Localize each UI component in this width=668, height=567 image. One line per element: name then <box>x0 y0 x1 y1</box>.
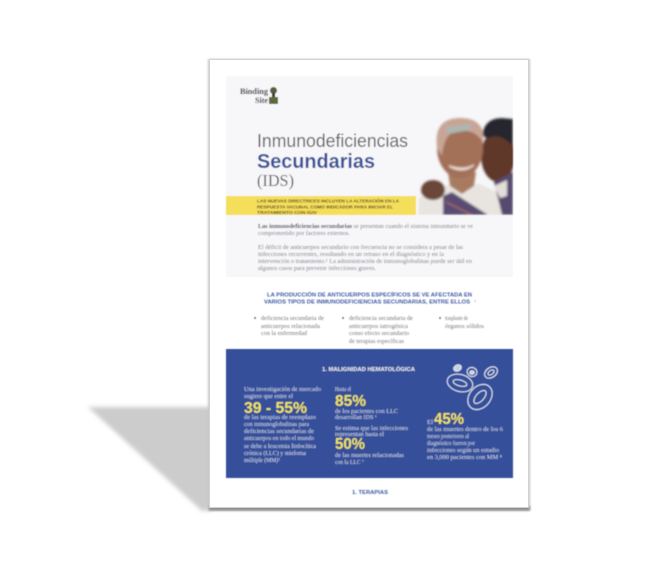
stat column: 39 - 55%: sugiere que entre el <box>244 393 293 400</box>
intro text block <box>258 223 473 272</box>
intro text block: intervención o tratamiento.¹ La administración de inmunoglobulinas puede ser útil en <box>258 258 473 265</box>
photo: two women embracing <box>418 118 515 215</box>
bullet list: column 3: órganos sólidos <box>445 323 484 330</box>
logo: Binding Site: Site <box>255 95 268 105</box>
stat column: 39 - 55%: crónica (LLC) y mieloma <box>244 450 306 457</box>
section heading: specific antibodies: VARIOS TIPOS DE INMUNODEFICIENCIAS SECUNDARIAS, ENTRE ELLOS <box>264 300 470 306</box>
bullet list: column 1: deficiencia secundaria de <box>261 315 324 322</box>
panel: hematologic malignancy <box>226 349 513 478</box>
bullet list: column 2: de terapias específicas <box>349 338 404 345</box>
intro text block: infecciones recurrentes, resultando en un retraso en el diagnóstico y en la <box>258 251 444 258</box>
stat column: 39 - 55%: deficiencias secundarias de <box>244 428 314 435</box>
bullet list: column 2 <box>342 315 413 345</box>
stat column: 39 - 55%: se debe a leucemia linfocítica <box>244 443 316 450</box>
section heading: specific antibodies: LA PRODUCCIÓN DE ANTICUERPOS ESPECÍFICOS SE VE AFECTADA EN <box>267 290 472 298</box>
stat column: 45%: diagnóstico fueron por <box>427 440 476 447</box>
stat column: 85% and 50%: Se estima que las infecciones <box>335 425 409 432</box>
intro text block: Las inmunodeficiencias secundarias se presentan cuando el sistema inmunitario se ve <box>258 223 473 230</box>
stat column: 85% and 50%: de las muertes relacionadas <box>335 452 405 459</box>
stat column: 45% <box>427 411 503 461</box>
stat column: 39 - 55% <box>244 386 321 464</box>
stat column: 45%: 45% <box>434 411 464 428</box>
bullet list: column 3 <box>439 315 484 330</box>
stat column: 85% and 50%: 85% <box>335 393 366 410</box>
stat column: 39 - 55%: con inmunoglobulinas para <box>244 421 309 428</box>
bullet list: column 2: como efecto secundario <box>349 330 409 337</box>
bullet list: column 1 <box>254 315 324 337</box>
panel heading: 1. MALIGNIDAD HEMATOLÓGICA <box>322 365 416 373</box>
next section heading: therapies: 1. TERAPIAS <box>352 490 388 496</box>
stat column: 39 - 55%: Una investigación de mercado <box>244 386 321 393</box>
title <box>257 130 408 190</box>
bullet list: column 1: anticuerpos relacionada <box>261 323 320 330</box>
stat column: 85% and 50%: de los pacientes con LLC <box>335 408 398 415</box>
bullet list: column 2: deficiencia secundaria de <box>349 315 413 322</box>
icon: blood cells <box>445 364 500 414</box>
stat column: 85% and 50%: Hasta el <box>335 386 351 393</box>
header panel <box>226 76 513 277</box>
stat column: 85% and 50%: 50% <box>335 436 365 453</box>
yellow callout band: RESPUESTA VACUNAL COMO INDICADOR PARA INICIAR EL <box>257 204 393 210</box>
stat column: 45%: de las muertes dentro de los 6 <box>427 426 503 433</box>
logo: Binding Site: Binding <box>240 86 269 96</box>
intro text block: comprometido por factores externos. <box>258 230 350 237</box>
stat column: 39 - 55%: múltiple (MM)⁵ <box>244 457 280 464</box>
stat column: 85% and 50%: desarrollan IDS ⁶ <box>335 414 377 421</box>
cast shadow of the page <box>88 407 212 511</box>
title: Inmunodeficiencias <box>257 130 408 151</box>
stat column: 85% and 50%: representan hasta el <box>335 431 384 438</box>
title: (IDS) <box>257 171 294 190</box>
yellow callout band: TRATAMIENTO CON IGIV <box>257 210 318 215</box>
yellow callout band <box>226 196 416 215</box>
stat column: 45%: infecciones según un estudio <box>427 447 499 454</box>
stat column: 85% and 50%: con la LLC ⁷ <box>335 459 364 466</box>
logo: Binding Site <box>240 86 278 105</box>
stat column: 39 - 55%: 39 - 55% <box>244 400 307 417</box>
section heading: specific antibodies: 1 <box>474 298 477 303</box>
yellow callout band: LAS NUEVAS DIRECTRICES INCLUYEN LA ALTERACIÓN EN LA <box>257 196 400 204</box>
bullet list: column 3: trasplante de <box>445 315 468 322</box>
title: Secundarias <box>257 151 375 173</box>
stat column: 39 - 55%: de las terapias de reemplazo <box>244 414 316 421</box>
stat column: 45%: El <box>427 419 433 426</box>
bullet list: column 2: anticuerpos iatrogénica <box>349 323 408 330</box>
intro text block: El déficit de anticuerpos secundario con frecuencia no se considera a pesar de las <box>258 244 463 251</box>
stat column: 39 - 55%: anticuerpos en todo el mundo <box>244 435 314 442</box>
stat column: 85% and 50% <box>335 386 409 466</box>
stat column: 45%: meses posteriores al <box>427 433 469 440</box>
stat column: 45%: en 3,000 pacientes con MM ⁸ <box>427 454 502 461</box>
page sheet <box>208 59 530 511</box>
bullet list: column 1: con la enfermedad <box>261 330 308 337</box>
section heading: specific antibodies <box>264 290 477 306</box>
intro text block: algunos casos para prevenir infecciones graves. <box>258 265 376 272</box>
